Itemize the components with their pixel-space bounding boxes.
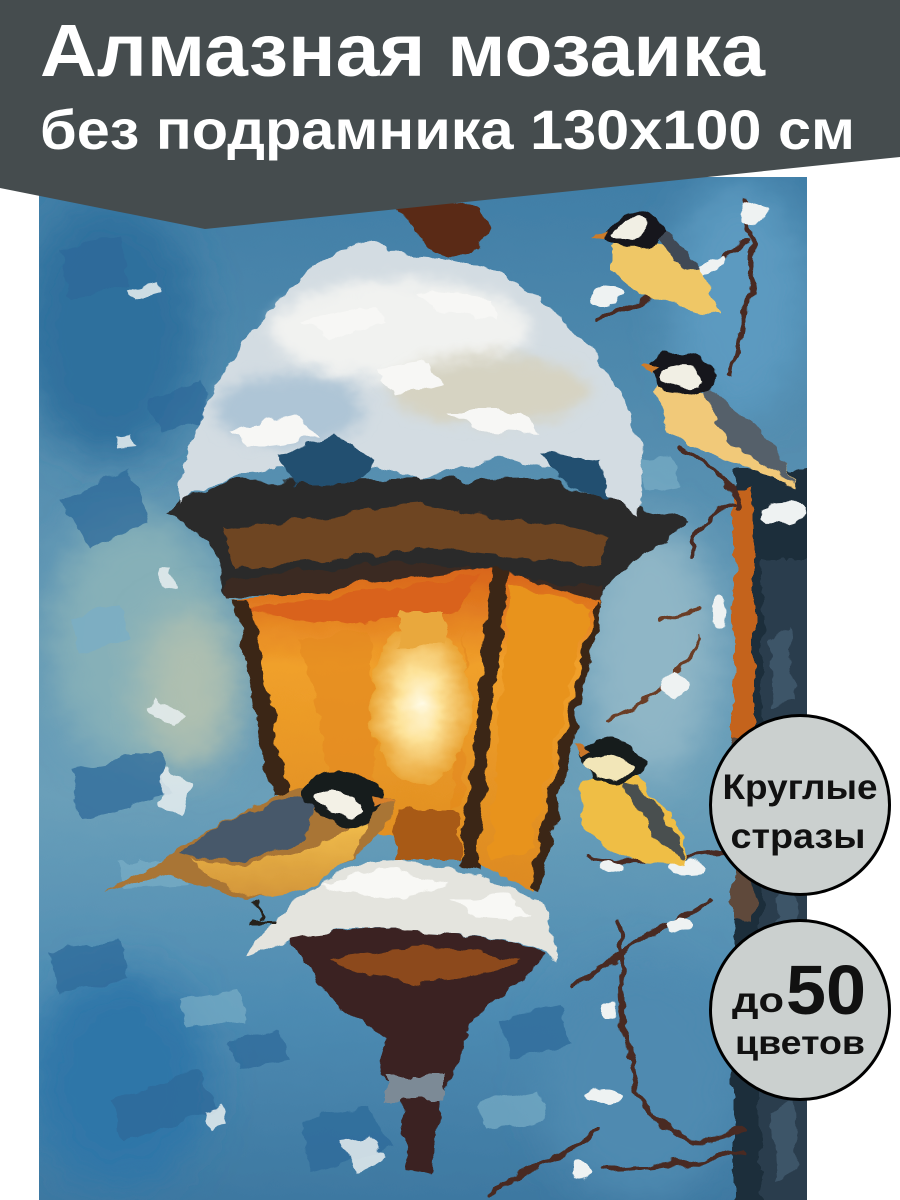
header banner — [0, 0, 900, 229]
bird: upper right middle — [640, 351, 798, 485]
badge: up to 50 colours: до — [732, 981, 784, 1020]
bird: bottom left — [105, 772, 396, 922]
badge: up to 50 colours: цветов — [735, 1024, 865, 1061]
lantern finial — [395, 200, 488, 256]
branches — [490, 200, 751, 1195]
lamp post — [728, 468, 807, 1200]
lantern roof — [165, 478, 690, 600]
painted blue background — [20, 160, 830, 1200]
badge: round rhinestones: стразы — [730, 817, 866, 856]
title: Алмазная мозаика — [40, 9, 766, 92]
badge: up to 50 colours — [710, 920, 890, 1100]
painting: lantern and birds in winter — [20, 160, 830, 1200]
lantern base — [290, 930, 545, 1175]
bird: right on branch bottom — [574, 738, 686, 866]
badge: round rhinestones: Круглые — [722, 768, 878, 807]
lantern glass — [232, 568, 602, 890]
snow dome — [182, 241, 642, 515]
subtitle: без подрамника 130х100 см — [40, 98, 855, 161]
badge: round rhinestones — [710, 716, 890, 894]
badge: up to 50 colours: 50 — [786, 951, 866, 1029]
snow on branches — [571, 200, 804, 1181]
bottom snow ledge — [245, 860, 560, 960]
bird: top right — [590, 212, 720, 315]
